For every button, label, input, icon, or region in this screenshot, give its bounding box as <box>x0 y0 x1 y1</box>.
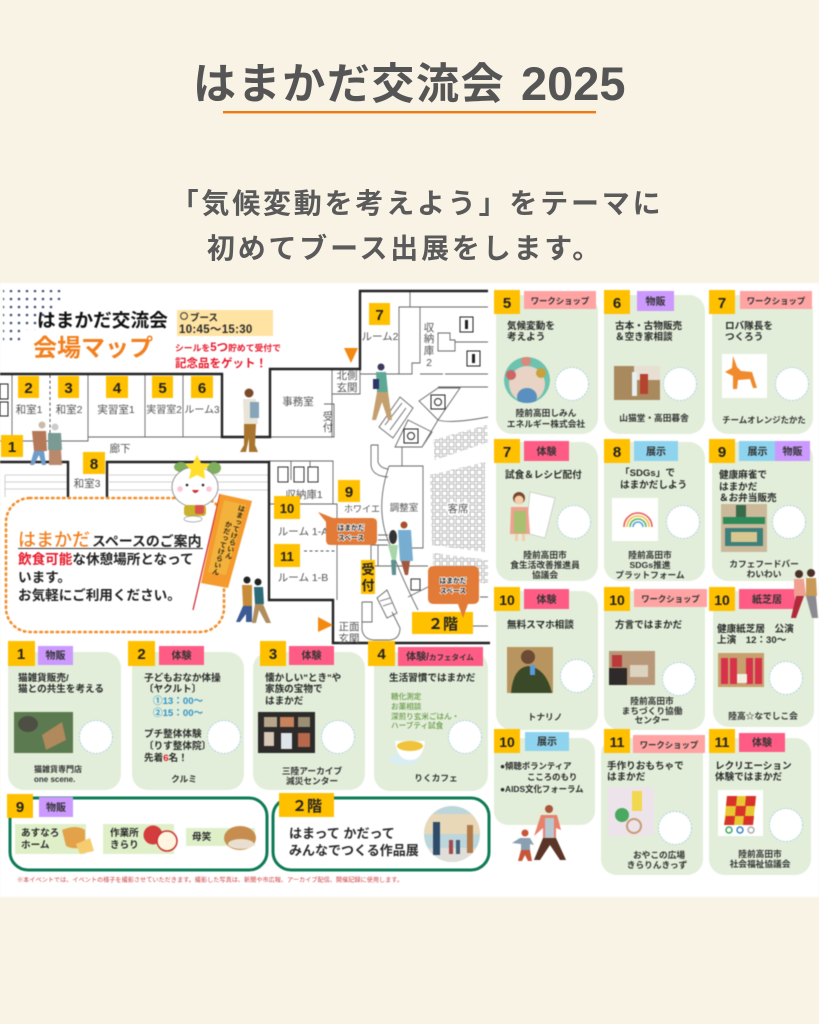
card 6: used books: 古本・古物販売 <box>615 320 683 332</box>
panel: booth 9 sales: きらり <box>110 840 139 851</box>
card 7: recipe tasting <box>494 439 598 581</box>
card 11: handmade toys: 11 <box>610 734 625 750</box>
card 4: lifestyle: 糖化測定 <box>391 691 422 701</box>
card 5: climate workshop: ワークショップ <box>531 296 590 306</box>
room labels: 実習室1 <box>97 403 135 416</box>
panel: booth 9 sales <box>7 794 267 870</box>
card 2: exercise: 〔りす整体院〕 <box>144 740 211 752</box>
card 11: handmade toys: きらりんきっず <box>627 859 688 870</box>
card 6: used books: ＆空き家相談 <box>615 331 673 343</box>
room labels: ルーム 1-B <box>278 572 328 584</box>
room labels: 納 <box>424 332 434 345</box>
room labels: 和室2 <box>56 404 83 416</box>
card 6: used books: 山猫堂・高田暮舎 <box>619 412 689 423</box>
card 4: lifestyle: 深煎り玄米ごはん・ <box>391 711 459 721</box>
room labels: 収納庫1 <box>285 488 323 501</box>
card 10: dialect workshop <box>604 587 707 730</box>
sticker note: シールを5つ貯めて受付で <box>175 342 281 354</box>
map booth numbers: 2 <box>24 380 33 397</box>
card 2: exercise: プチ整体体験 <box>144 728 202 740</box>
parent and child illustration <box>512 805 566 861</box>
callout: hamakada space 1 <box>318 512 377 545</box>
card 7: recipe tasting: 体験 <box>536 445 556 458</box>
card 5: climate workshop: 陸前高田しみん <box>516 407 577 418</box>
card 3: archive: はまかだ <box>265 696 304 707</box>
card 7: recipe tasting: 試食＆レシピ配付 <box>505 469 582 481</box>
card 7: recipe tasting: 協議会 <box>532 569 558 580</box>
card 3: archive: 体験 <box>302 649 322 662</box>
card 9: mahjong: 展示 <box>748 446 768 458</box>
card 4: lifestyle: ハーブティ試食 <box>391 720 444 730</box>
banner <box>193 494 252 610</box>
card 1: cat goods <box>8 641 121 790</box>
card 1: cat goods: 猫雑貨販売/ <box>18 672 69 684</box>
card 7: donkey workshop: つくろう <box>725 332 763 343</box>
card 4: lifestyle: 生活習慣ではまかだ <box>389 672 476 684</box>
map booth numbers: ２階 <box>428 616 458 633</box>
sticker note <box>175 342 281 370</box>
card 11: recreation: 社会福祉協議会 <box>730 858 791 869</box>
info box: hamakada space: はまかだ <box>18 530 90 550</box>
subtitle <box>171 188 663 264</box>
card 8: SDGs: プラットフォーム <box>615 570 685 580</box>
callout: hamakada space 2: スペース <box>440 587 466 595</box>
card 4: lifestyle: 体験/カフェタイム <box>406 650 474 663</box>
card 10: exhibits: 展示 <box>537 736 557 748</box>
card 6: used books: 物販 <box>646 295 666 308</box>
card 9: mahjong <box>709 439 813 581</box>
panel: 2nd floor exhibition <box>273 793 489 870</box>
card 9: mahjong: 物販 <box>782 445 802 458</box>
card 9: mahjong: ＆お弁当販売 <box>719 492 777 504</box>
card 7: recipe tasting: 食生活改善推進員 <box>510 559 580 570</box>
room labels: 玄関 <box>338 632 360 645</box>
card 7: donkey workshop: ロバ隊長を <box>725 320 773 332</box>
card 10: smartphone: 10 <box>499 592 515 608</box>
card 1: cat goods: 猫雑貨専門店 <box>34 764 82 774</box>
card 3: archive: 3 <box>269 646 277 663</box>
room labels: 調整室 <box>390 502 418 514</box>
card 3: archive <box>253 641 365 790</box>
card 11: handmade toys: はまかだ <box>607 772 646 783</box>
card 2: exercise: ①13：00～ <box>153 696 204 707</box>
card 9: mahjong: 健康麻雀で <box>719 469 767 481</box>
room labels: 事務室 <box>282 395 314 408</box>
floor plan <box>0 291 490 643</box>
card 10: smartphone: 体験 <box>536 593 556 606</box>
card 2: exercise: クルミ <box>171 774 197 784</box>
card 7: donkey workshop: 7 <box>718 295 726 312</box>
callout: hamakada space 2: はまかだ <box>439 577 467 585</box>
map booth numbers: 4 <box>113 380 122 397</box>
card 11: recreation: 11 <box>715 734 730 750</box>
map booth numbers: 11 <box>280 549 294 564</box>
card 8: SDGs <box>604 439 705 581</box>
panel: booth 9 sales: 母笑 <box>192 831 212 843</box>
card 11: recreation <box>709 729 811 875</box>
card 10: health kamishibai: 10 <box>714 592 730 608</box>
card 2: exercise: 〔ヤクルト〕 <box>144 683 201 695</box>
card 10: dialect workshop: センター <box>635 714 669 725</box>
card 2: exercise: 先着6名！ <box>144 752 188 764</box>
card 10: exhibits <box>494 729 595 825</box>
panel: 2nd floor exhibition: はまって かだって <box>289 826 395 841</box>
map booth numbers <box>1 303 473 634</box>
room labels: 収 <box>424 322 435 334</box>
info box: hamakada space: います。 <box>18 570 71 585</box>
card 3: archive: 家族の宝物で <box>265 683 323 695</box>
card 10: exhibits: ●AIDS文化フォーラム <box>500 784 583 794</box>
card 7: recipe tasting: 陸前高田市 <box>523 549 567 560</box>
card 8: SDGs: はまかだしよう <box>620 480 687 491</box>
card 9: mahjong: 9 <box>718 444 726 461</box>
info box: hamakada space: お気軽にご利用ください。 <box>18 587 181 603</box>
card 7: donkey workshop: チームオレンジたかた <box>722 415 806 425</box>
card 11: recreation: レクリエーション <box>715 761 792 772</box>
card 8: SDGs: 陸前高田市 <box>628 549 672 560</box>
card 11: handmade toys <box>601 729 705 875</box>
card 5: climate workshop <box>494 290 598 434</box>
room labels: 庫 <box>424 344 435 357</box>
room labels: ルーム 1-A <box>278 526 328 538</box>
card 4: lifestyle: 4 <box>377 646 386 663</box>
card 10: health kamishibai: 健康紙芝居 公演 <box>717 623 794 635</box>
room labels: 廊下 <box>110 442 130 455</box>
card 7: donkey workshop: ワークショップ <box>747 296 806 306</box>
card 1: cat goods: 1 <box>17 646 25 663</box>
mascot <box>172 455 221 522</box>
room labels: ルーム3 <box>184 404 220 416</box>
card 11: recreation: 体験ではまかだ <box>715 771 783 783</box>
room labels: 客席 <box>448 502 468 515</box>
card 7: donkey workshop <box>709 290 813 434</box>
card 5: climate workshop: 考えよう <box>507 332 545 343</box>
booth hours: ブース <box>190 312 218 324</box>
card 10: smartphone <box>494 587 598 730</box>
info box: hamakada space <box>6 498 224 632</box>
banner: はまってけらいん <box>224 504 246 560</box>
map booth numbers: 3 <box>64 380 73 397</box>
card 9: mahjong: カフェフードバー <box>729 559 799 569</box>
title <box>193 57 626 110</box>
room labels: 2 <box>426 357 432 369</box>
footnote: ※本イベントでは、イベントの様子を撮影させていただきます。撮影した写真は、新聞や市広報、アーカイブ配信、開催記録に使用します。 <box>17 876 403 884</box>
panel: 2nd floor exhibition: みんなでつくる作品展 <box>289 843 419 858</box>
panel: 2nd floor exhibition: ２階 <box>292 798 322 815</box>
card 8: SDGs: SDGs推進 <box>629 559 671 570</box>
card 2: exercise: ②15：00～ <box>153 708 204 719</box>
card 11: handmade toys: ワークショップ <box>640 740 699 750</box>
map booth numbers: 6 <box>198 380 206 397</box>
card 10: smartphone: トナリノ <box>528 712 562 722</box>
card 8: SDGs: 「SDGs」で <box>620 467 675 479</box>
sticker note: 記念品をゲット！ <box>175 356 267 370</box>
seating blocks <box>433 425 488 460</box>
card 10: health kamishibai: 上演 12：30～ <box>717 634 787 646</box>
map booth numbers: 8 <box>90 456 98 473</box>
card 2: exercise: 2 <box>137 646 146 663</box>
card 10: smartphone: 無料スマホ相談 <box>507 619 574 631</box>
title: 2025 <box>521 57 626 110</box>
card 11: handmade toys: おやこの広場 <box>633 849 685 860</box>
map booth numbers: 10 <box>280 501 294 516</box>
card 1: cat goods: 物販 <box>46 649 66 662</box>
panel: venue map <box>0 290 490 645</box>
card 4: lifestyle: お薬相談 <box>391 701 422 711</box>
card 10: exhibits: ●傾聴ボランティア <box>500 761 572 771</box>
info box: hamakada space: 飲食可能な休憩場所となって <box>18 551 194 567</box>
card 10: health kamishibai: 紙芝居 <box>752 593 782 606</box>
callout: hamakada space 1: スペース <box>338 534 364 542</box>
map booth numbers: 5 <box>158 380 167 397</box>
panel: event map sheet <box>0 283 819 897</box>
callout: hamakada space 2 <box>428 566 479 618</box>
map booth numbers: 7 <box>375 307 384 324</box>
card 10: dialect workshop: 10 <box>609 592 625 608</box>
card 6: used books <box>604 290 705 434</box>
card 10: exhibits: 10 <box>499 734 515 750</box>
card 3: archive: 懐かしい"とき"や <box>265 672 341 684</box>
banner: かだってけらいん <box>211 520 233 576</box>
card 11: handmade toys: 手作りおもちゃで <box>607 760 684 772</box>
card 1: cat goods: one scene. <box>34 775 75 784</box>
arrows: entrances <box>318 348 358 632</box>
panel: booth 9 sales: ホーム <box>21 840 50 851</box>
panel: booth 9 sales: 作業所 <box>110 827 139 839</box>
card 6: used books: 6 <box>613 295 621 312</box>
card 8: SDGs: 展示 <box>646 446 666 458</box>
subtitle: 初めてブース出展をします。 <box>207 232 603 264</box>
card 5: climate workshop: 気候変動を <box>507 320 555 332</box>
room labels: 和室1 <box>16 404 43 416</box>
room labels: ホワイエ <box>344 504 380 514</box>
callout: hamakada space 1: はまかだ <box>337 524 365 532</box>
card 4: lifestyle <box>368 641 488 791</box>
room labels: 付 <box>323 421 333 434</box>
card 9: mahjong: わいわい <box>747 569 782 579</box>
card 5: climate workshop: エネルギー株式会社 <box>507 418 585 429</box>
card 10: exhibits: こころのもり <box>527 772 577 782</box>
card 10: dialect workshop: まちづくり協働 <box>622 705 683 716</box>
icons: restroom and accessibility <box>0 317 480 590</box>
card 2: exercise: 子どもおなか体操 <box>144 672 221 684</box>
couple illustration <box>791 569 818 618</box>
map booth numbers: 1 <box>8 439 16 456</box>
map heading: 会場マップ <box>33 335 153 362</box>
map heading: はまかだ交流会 <box>37 310 168 331</box>
decorative dots <box>3 290 62 342</box>
room labels: 玄関 <box>336 381 358 394</box>
subtitle: 「気候変動を考えよう」をテーマに <box>171 188 663 219</box>
card 1: cat goods: 猫との共生を考える <box>18 683 104 695</box>
title: はまかだ交流会 <box>193 61 505 109</box>
room labels: 正面 <box>338 621 360 633</box>
panel: booth 9 sales: 9 <box>16 799 24 816</box>
card 5: climate workshop: 5 <box>503 295 511 312</box>
card 10: dialect workshop: 陸前高田市 <box>630 695 674 706</box>
card 3: archive: 減災センター <box>286 775 338 786</box>
title underline <box>223 111 596 113</box>
room labels: ルーム2 <box>361 331 399 343</box>
card 11: recreation: 陸前高田市 <box>738 848 782 859</box>
room labels: 受 <box>323 411 333 423</box>
room labels: 和室3 <box>74 478 101 490</box>
room labels: 実習室2 <box>146 403 182 416</box>
card 10: dialect workshop: 方言ではまかだ <box>615 619 683 631</box>
panel: booth 9 sales: 物販 <box>46 801 66 814</box>
room labels <box>16 322 468 645</box>
map booth numbers: 受 <box>361 562 375 577</box>
map booth numbers: 9 <box>345 484 353 501</box>
panel: booth 9 sales: あすなろ <box>21 828 59 839</box>
people illustrations on map <box>30 364 413 623</box>
booth hours: 10:45～15:30 <box>179 324 253 336</box>
card 10: dialect workshop: ワークショップ <box>641 594 700 604</box>
card 11: recreation: 体験 <box>752 736 772 749</box>
card 2: exercise <box>128 641 244 790</box>
booth hours <box>177 310 273 336</box>
card 7: recipe tasting: 7 <box>503 444 511 461</box>
card 10: health kamishibai <box>709 587 814 727</box>
info box: hamakada space: スペースのご案内 <box>92 533 201 549</box>
card 10: health kamishibai: 陸高☆なでしこ会 <box>728 710 798 721</box>
card 2: exercise: 体験 <box>172 649 192 662</box>
room labels: 北側 <box>336 369 358 382</box>
card 4: lifestyle: りくカフェ <box>414 773 458 783</box>
card 8: SDGs: 8 <box>613 444 621 461</box>
map heading <box>33 310 168 362</box>
map booth numbers: 付 <box>361 578 375 593</box>
card 3: archive: 三陸アーカイブ <box>282 765 342 776</box>
card 9: mahjong: はまかだ <box>719 482 758 493</box>
